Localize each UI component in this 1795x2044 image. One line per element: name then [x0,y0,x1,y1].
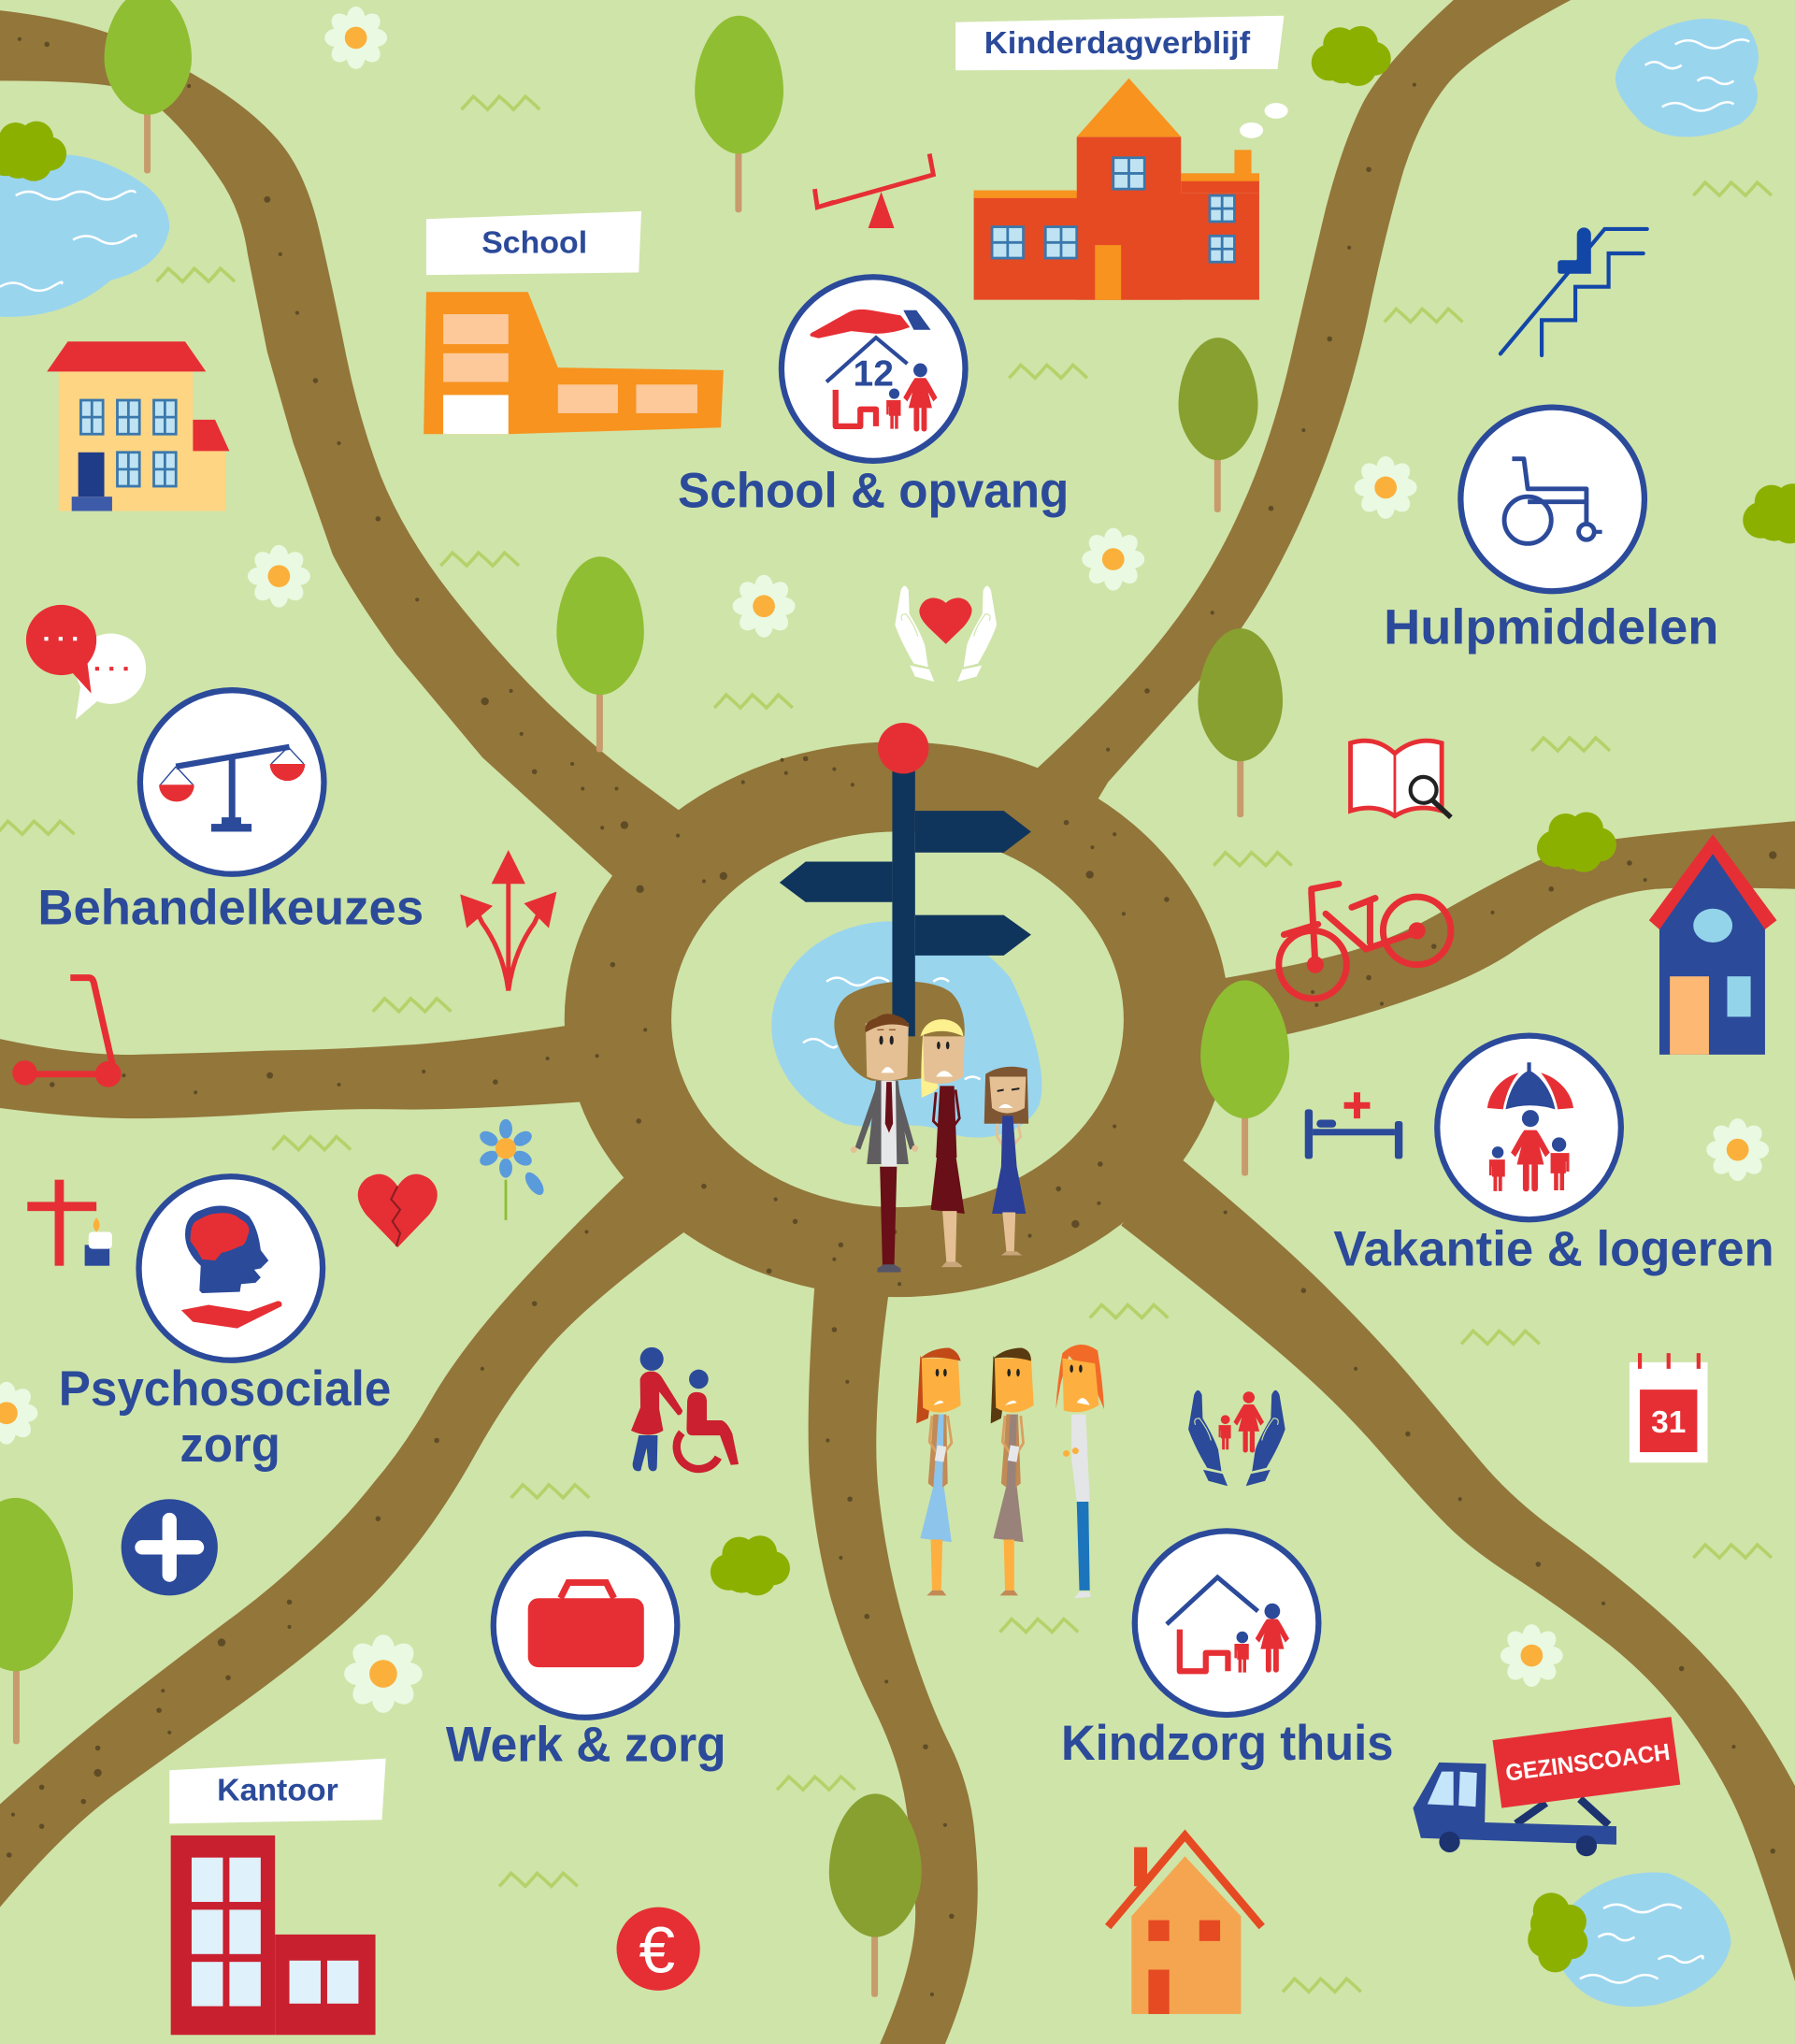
icon: book and magnifier [1351,741,1451,817]
school label: School [481,225,587,260]
tree 4 [556,556,644,752]
roundabout [565,741,1229,1297]
panel: Hulpmiddelen [1384,408,1718,655]
heading: Behandelkeuzes: Behandelkeuzes [37,880,424,935]
panel: Werk & zorg [446,1533,726,1772]
heading: Vakantie & logeren: Vakantie & logeren [1333,1222,1774,1277]
icon: medical plus [122,1499,218,1595]
icon: euro coin [617,1907,700,1991]
icon: heart in hands [895,586,997,682]
road: right [1213,821,1795,1049]
tree 8 [829,1793,922,1997]
house: yellow top left [47,341,229,511]
icon: cross and candle [27,1180,112,1266]
lake: top right [1616,19,1759,137]
person: girl in blue dress [984,1067,1028,1256]
icon: hospital bed [1305,1092,1402,1159]
icon: head and hand circle [138,1176,323,1360]
road: top right [1036,0,1571,814]
tree 6 [1200,980,1289,1176]
kinderdagverblijf building [974,79,1288,300]
tree 7 [0,1498,73,1744]
icon: school circle: 12 [854,354,894,395]
person: woman a with notepad [916,1348,961,1595]
icon: blue flower [477,1119,547,1220]
heading: Psychosociale zorg: zorg [180,1418,280,1473]
school label [426,211,641,275]
kantoor label [169,1759,386,1823]
icon: briefcase circle [494,1533,677,1718]
icon: home care circle [1135,1531,1318,1715]
icon: euro coin: € [639,1913,675,1986]
road: left [0,1025,586,1118]
icon: school circle [782,277,966,461]
tree 2 [695,16,783,212]
icon: stairlift [1501,227,1647,355]
centre lake [771,921,1041,1138]
lake waves [803,978,981,1079]
person: woman c in white coat [1055,1345,1104,1598]
icon: kick scooter [12,978,122,1087]
icon: family in hands [1188,1390,1285,1486]
kinderdagverblijf label [955,16,1284,70]
school building [424,292,724,434]
truck: gezinscoach [1413,1717,1680,1856]
heading: Psychosociale zorg: Psychosociale [59,1361,391,1417]
icon: seesaw [814,154,933,228]
heading: Werk & zorg: Werk & zorg [446,1717,726,1772]
panel: Behandelkeuzes [37,690,424,935]
panel: Kindzorg thuis [1061,1531,1394,1771]
kinderdagverblijf label: Kinderdagverblijf [984,26,1251,61]
person: woman in red dress [920,1019,965,1267]
road: top left [0,10,730,913]
panel: Vakantie & logeren [1333,1036,1774,1277]
kantoor label: Kantoor [217,1773,338,1807]
truck: gezinscoach: GEZINSCOACH [1504,1739,1672,1787]
heading: Psychosociale zorg [59,1361,391,1473]
icon: caregiver with wheelchair [631,1347,739,1471]
tree 5 [1198,628,1283,817]
house: blue right [1649,834,1776,1055]
lake: top left [0,154,169,317]
person: man [851,1014,918,1273]
heading: School & opvang: School & opvang [678,463,1069,518]
icon: broken heart [358,1174,438,1247]
tree 3 [1178,338,1258,512]
person: woman b with notepad [991,1348,1034,1595]
panel: Psychosociale zorg [59,1176,391,1473]
house: orange bottom [1108,1835,1262,2014]
road: bottom right [1121,1158,1795,1981]
heading: Hulpmiddelen: Hulpmiddelen [1384,600,1718,655]
centre island [834,982,965,1081]
road: bottom [809,1284,978,2044]
icon: three way arrows [460,850,556,991]
panel: School & opvang [678,277,1069,518]
icon: umbrella family circle [1437,1036,1621,1219]
office building [171,1835,376,2035]
icon: calendar: 31 [1651,1405,1686,1440]
heading: Kindzorg thuis: Kindzorg thuis [1061,1716,1394,1771]
road: bottom left [0,1173,684,1907]
lake: bottom right [1561,1873,1731,2007]
icon: scales circle [140,690,323,874]
icon: wheelchair circle [1460,408,1644,591]
icon: speech bubbles [26,605,146,720]
signpost [780,723,1031,1036]
icon: bicycle [1279,884,1451,999]
icon: calendar [1630,1353,1708,1462]
tree 1 [105,0,192,173]
